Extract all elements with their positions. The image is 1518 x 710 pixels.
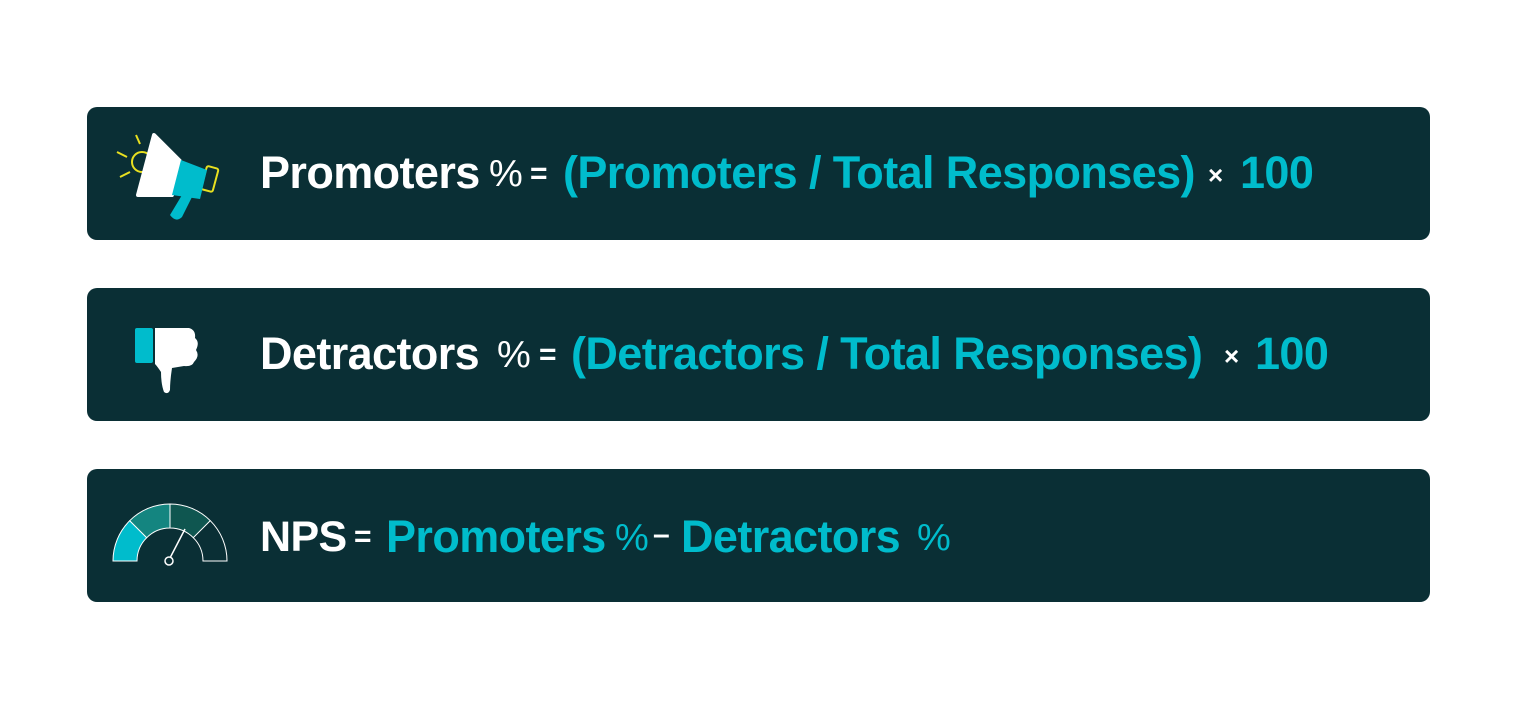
panel: detractors formula bbox=[87, 288, 1430, 421]
panel: NPS formula bbox=[87, 469, 1430, 602]
text: NPS formula: = bbox=[354, 520, 371, 553]
panel: promoters formula bbox=[87, 107, 1430, 240]
text: promoters formula: = bbox=[530, 157, 547, 190]
text: detractors formula bbox=[260, 328, 1328, 379]
text: NPS formula bbox=[260, 511, 950, 562]
text: promoters formula: % bbox=[489, 153, 522, 195]
text: detractors formula: = bbox=[539, 338, 556, 371]
icon: megaphone bbox=[116, 133, 220, 220]
text: NPS formula: % bbox=[917, 517, 950, 559]
text: promoters formula: × bbox=[1208, 160, 1223, 190]
text: promoters formula: 100 bbox=[1240, 147, 1313, 198]
text: detractors formula: × bbox=[1224, 341, 1239, 371]
text: promoters formula: (Promoters / Total Responses) bbox=[563, 147, 1195, 198]
text: detractors formula: % bbox=[497, 334, 530, 376]
text: NPS formula: Promoters bbox=[386, 511, 606, 562]
icon: thumbs down bbox=[135, 328, 198, 394]
text: NPS formula: NPS bbox=[260, 513, 347, 561]
text: promoters formula bbox=[260, 147, 1313, 198]
text: detractors formula: 100 bbox=[1255, 328, 1328, 379]
text: detractors formula: (Detractors / Total Responses) bbox=[571, 328, 1202, 379]
text: promoters formula: Promoters bbox=[260, 147, 480, 198]
text: NPS formula: % bbox=[615, 517, 648, 559]
text: NPS formula: – bbox=[653, 518, 669, 551]
icon: gauge bbox=[112, 504, 228, 566]
text: NPS formula: Detractors bbox=[681, 511, 900, 562]
text: detractors formula: Detractors bbox=[260, 328, 479, 379]
